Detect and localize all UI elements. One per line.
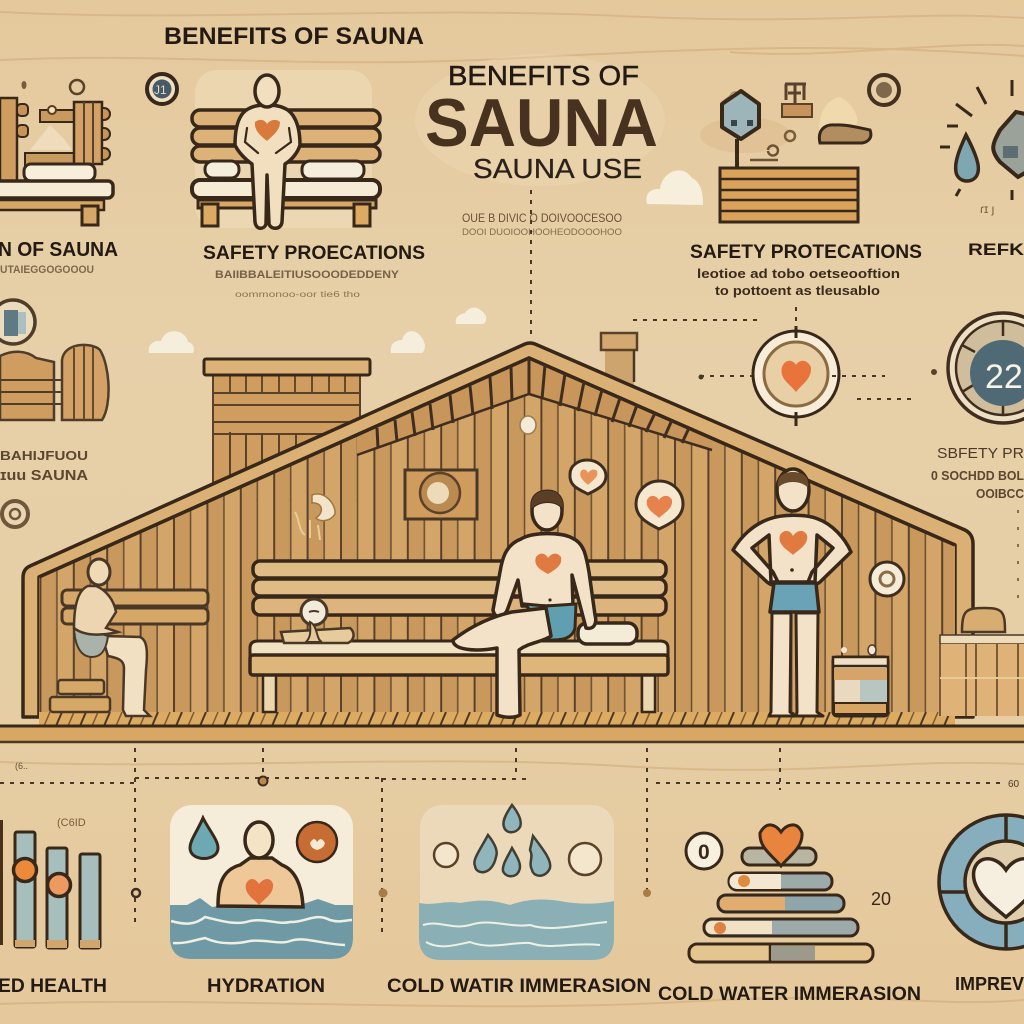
sauna building	[23, 343, 973, 717]
caption: refk: REFK	[968, 240, 1024, 259]
chart: pyramid: 0	[698, 841, 710, 864]
caption: safety protecations: leotioe ad tobo oetseooftion	[697, 266, 900, 281]
icon: spiral badge	[2, 501, 28, 527]
title subtext: DOOI DUOIOOHOOHEODOOOHOO	[462, 227, 622, 237]
chart: pyramid: 20	[871, 889, 891, 909]
floor	[0, 712, 1024, 742]
caption: safety proecations	[203, 243, 425, 299]
icon: steam swirl	[295, 494, 335, 540]
icon: house sign on stand	[700, 91, 790, 167]
icon: drops	[474, 805, 550, 876]
main title: SAUNA USE	[473, 153, 642, 184]
chart: vertical bars	[0, 817, 100, 948]
caption: left sauna label: ɪuu SAUNA	[0, 467, 88, 484]
chart: vertical bars: (C6ID	[57, 817, 86, 829]
pillow	[578, 623, 637, 644]
figure: person in water	[218, 822, 303, 907]
caption: safety protecations: to pottoent as tleusablo	[715, 283, 880, 298]
main sauna bench	[250, 561, 668, 712]
icon: temperature gauge	[948, 313, 1024, 423]
icon: floating hearts	[570, 460, 683, 529]
wall hook	[520, 416, 536, 434]
panel: hydration	[170, 805, 353, 959]
figure: central seated person	[453, 490, 596, 717]
icon: water drop	[190, 818, 218, 858]
bench right	[940, 608, 1024, 716]
roof frame	[23, 343, 973, 717]
cloud icons row	[149, 308, 486, 353]
main title: BENEFITS OF	[448, 60, 639, 91]
title subtext	[462, 211, 622, 237]
panel: sauna interior top-left icon	[0, 80, 113, 225]
icon: orange circle	[297, 822, 337, 862]
caption: safety protecations: SAFETY PROTECATIONS	[690, 242, 922, 263]
icon: heart target	[753, 326, 839, 426]
panel: left sauna small icons	[0, 300, 109, 420]
icon: wooden stack	[720, 168, 858, 222]
main title	[415, 54, 665, 186]
caption: safety proecations: BAIIBBALEITIUSOOODEDDENY	[215, 269, 400, 281]
figure: seated person	[235, 75, 300, 228]
dotted connectors: bottom: (6..	[15, 761, 28, 771]
caption: improv: IMPREV	[955, 974, 1024, 994]
caption: left sauna label: BAHIJFUOU	[0, 448, 88, 463]
panel: person seated on bench	[192, 70, 380, 228]
title subtext: OUE B DIVIC O DOIVOOCESOO	[462, 211, 622, 225]
caption: cold water immersion: COLD WATIR IMMERASION	[387, 976, 651, 997]
icon: badge circles	[434, 843, 601, 875]
roof inner line	[39, 358, 955, 577]
caption: of sauna: N OF SAUNA	[0, 239, 118, 261]
dotted connectors: bottom	[0, 748, 1020, 935]
wall slats	[39, 350, 955, 715]
caption: of sauna	[0, 239, 118, 276]
icon: drops and rays: ɾɪ ȷ	[980, 202, 994, 216]
small wall bench	[50, 590, 208, 712]
heading: benefits of sauna: BENEFITS OF SAUNA	[164, 23, 424, 50]
caption: of sauna: UTAIEGGOGOOOU	[0, 264, 94, 276]
icon: wall badge	[870, 562, 904, 596]
dotted connectors: top	[531, 190, 1018, 605]
caption: safety proecations: SAFETY PROECATIONS	[203, 243, 425, 264]
wooden bucket	[833, 645, 888, 716]
icon: drops and rays	[940, 80, 1024, 216]
caption: safety protecations	[690, 242, 922, 298]
main title: SAUNA	[425, 85, 658, 161]
cloud	[646, 170, 703, 205]
icon: small clock badge: J1	[154, 83, 167, 97]
panel: cold water	[419, 805, 614, 960]
towel and bowl on bench	[281, 599, 354, 643]
dotted connectors: bottom: 60	[1008, 779, 1020, 790]
chart: heart donut	[939, 815, 1024, 949]
caption: safety proecations: oommonoo-oor tie6 tho	[235, 290, 361, 299]
caption: safety pr: SBFETY PR	[937, 445, 1024, 462]
icon: wall clock plaque	[405, 470, 477, 519]
caption: left sauna label	[0, 448, 88, 484]
icon: small clock badge	[147, 74, 177, 104]
chart: pyramid	[686, 825, 891, 962]
caption: cold water immersion two: COLD WATER IMMERASION	[658, 984, 921, 1005]
icon: small sauna symbols	[750, 75, 899, 160]
caption: health: ED HEALTH	[0, 976, 107, 997]
icon: temperature gauge: 22	[985, 358, 1023, 396]
figure: seated person left	[74, 559, 150, 716]
chimney	[204, 359, 370, 500]
caption: hydration: HYDRATION	[207, 976, 325, 997]
right chimney	[601, 333, 637, 390]
caption: safety pr	[931, 445, 1024, 501]
rafters	[357, 358, 712, 455]
figure: standing person	[733, 469, 851, 716]
